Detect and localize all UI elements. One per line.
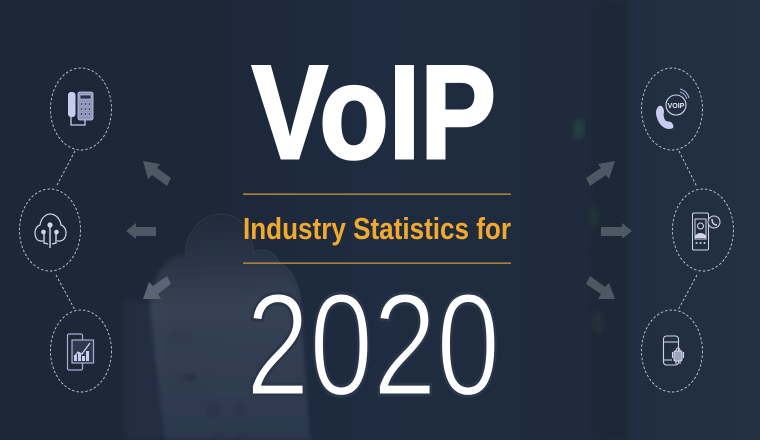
icon: cloud network <box>35 214 66 248</box>
left dashed circles and connectors <box>20 68 112 392</box>
left arrows <box>126 161 171 299</box>
arrow: right <box>601 223 632 239</box>
divider bottom <box>243 262 511 264</box>
arrow: up-left <box>143 161 171 186</box>
right arrows <box>586 161 632 299</box>
title: VoIP: VoIP <box>252 39 496 187</box>
right dashed circles and connectors <box>642 68 734 392</box>
subtitle: Industry Statistics for <box>243 211 511 246</box>
year: 2020: 2020 <box>246 263 500 426</box>
arrow: left <box>126 223 156 239</box>
arrow: down-left <box>143 276 171 299</box>
icon: phone video call <box>692 213 720 250</box>
icon: VoIP handset <box>656 89 689 129</box>
icon: VoIP handset: VOIP <box>668 103 685 110</box>
icon: desk phone <box>68 92 93 125</box>
divider top <box>243 194 511 195</box>
icon: android phone <box>664 336 684 365</box>
arrow: down-right <box>586 276 615 299</box>
icon: phone with chart <box>68 334 94 370</box>
arrow: up-right <box>586 161 615 186</box>
background cloud and server photo <box>150 214 310 440</box>
